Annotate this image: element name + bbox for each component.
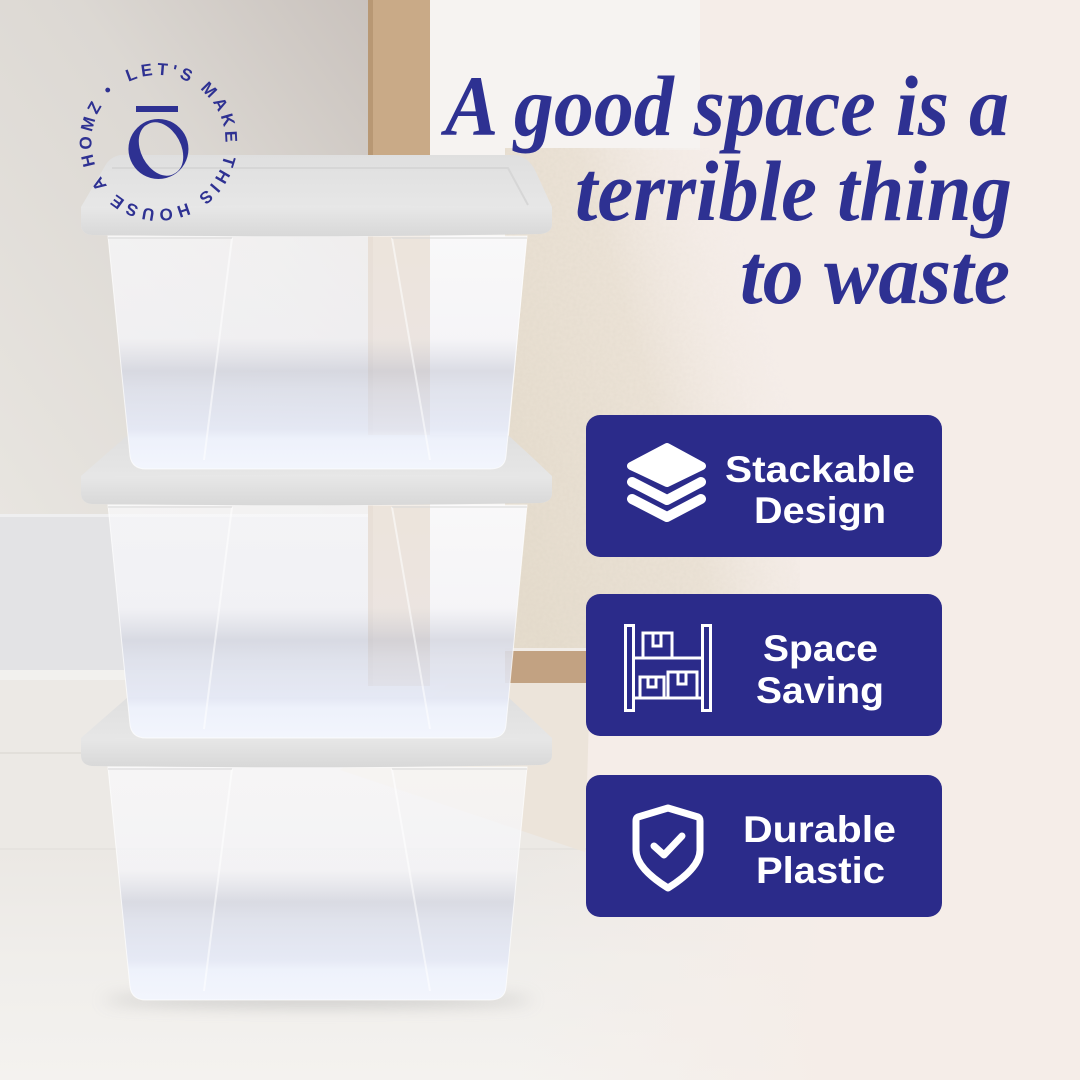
label: space saving: Saving — [756, 670, 884, 711]
background: room scene — [0, 0, 772, 896]
label: durable plastic — [743, 809, 896, 891]
shadow under the stack — [103, 994, 533, 1006]
logo badge — [80, 63, 238, 221]
label: durable plastic: Durable — [743, 809, 896, 850]
badge ring text: LET'S MAKE THIS HOUSE A HOMZ • — [80, 63, 238, 221]
icon: shield with check — [636, 808, 700, 888]
icon: stacked layers — [631, 447, 702, 517]
feature panel: stackable design — [586, 415, 942, 557]
heading: A good space is a — [440, 58, 1009, 154]
product: middle storage box — [81, 435, 552, 738]
product: bottom storage box — [81, 697, 552, 1000]
product: top storage box — [81, 155, 552, 469]
label: space saving: Space — [763, 628, 878, 669]
heading: terrible thing — [575, 143, 1012, 239]
badge logo mark — [128, 106, 188, 179]
label: durable plastic: Plastic — [756, 850, 885, 891]
icon: shelf with boxes — [626, 626, 710, 710]
heading — [440, 58, 1012, 322]
label: stackable design — [725, 449, 915, 531]
label: stackable design: Stackable — [725, 449, 915, 490]
label: space saving — [756, 628, 884, 711]
feature panel: durable plastic — [586, 775, 942, 917]
heading: to waste — [740, 226, 1010, 322]
label: stackable design: Design — [754, 490, 886, 531]
feature panel: space saving — [586, 594, 942, 736]
